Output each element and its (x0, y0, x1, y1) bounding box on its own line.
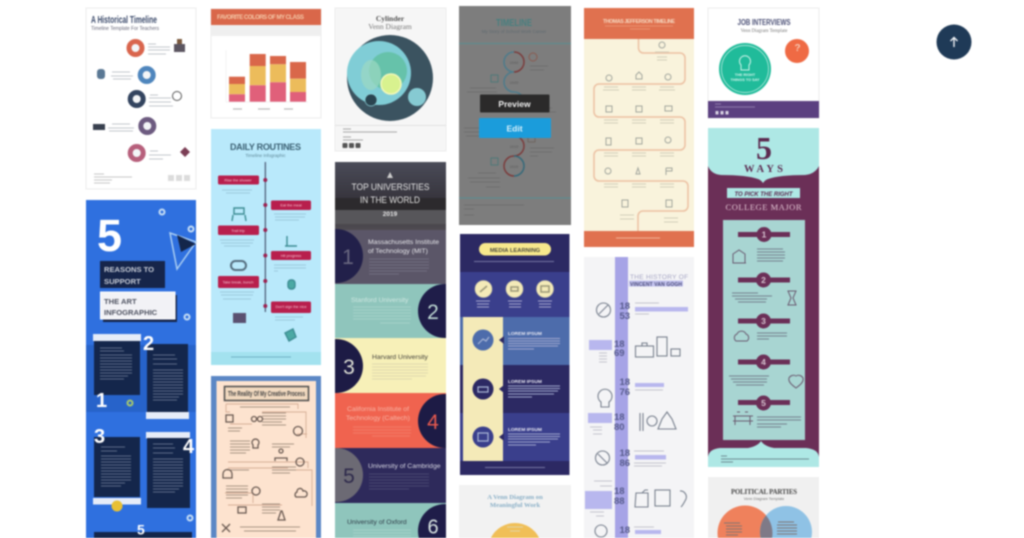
timeline icons (491, 53, 537, 165)
green circle: THINGS TO SAY (730, 78, 760, 82)
chart legend (233, 108, 293, 110)
rank 1: MIT: Massachusetts Institute (368, 239, 439, 246)
subheading: Venn Diagram Template (744, 497, 784, 501)
reason panel 2: 2 (143, 333, 154, 355)
purple footer (708, 101, 819, 118)
timeline year labels: 2000 (510, 61, 518, 65)
timeline captions (603, 52, 678, 222)
years: 18 (614, 412, 625, 423)
rank 2: Stanford: Stanford University (351, 297, 409, 304)
s-curve timeline (504, 52, 524, 176)
reason panel 4 (146, 432, 195, 508)
card: political parties venn (708, 477, 819, 538)
circle text (507, 527, 523, 531)
rank 4: Caltech: California Institute of (347, 406, 409, 413)
box: the art infographic (100, 292, 177, 322)
teal bottom tab (708, 441, 819, 467)
reason panel 5: 5 (137, 522, 145, 538)
timeline icons (605, 42, 672, 207)
rank 2: Stanford: 2 (427, 301, 439, 324)
bottom banner (584, 231, 694, 247)
rank 1: MIT (334, 228, 447, 285)
routine label text (222, 178, 307, 309)
rank 5: Cambridge: University of Cambridge (368, 463, 441, 470)
routine label text: Eat the meal (280, 204, 302, 208)
rank 4: Caltech: 4 (427, 411, 439, 434)
screen icon (233, 313, 246, 323)
ribbon (727, 188, 800, 198)
rank 1: MIT: of Technology (MIT) (368, 248, 428, 255)
title pill: MEDIA LEARNING (490, 248, 541, 254)
heading: political parties: POLITICAL PARTIES (731, 489, 797, 496)
card: top universities (334, 161, 447, 538)
teal top arch (708, 128, 819, 183)
card: job interviews (708, 8, 819, 118)
card: five ways college major (708, 128, 819, 467)
photo header (335, 162, 446, 230)
timeline rings (129, 42, 154, 160)
row headings: LOREM IPSUM (508, 427, 542, 433)
venn circles (347, 35, 433, 121)
box: the art infographic: INFOGRAPHIC (104, 308, 158, 317)
years: 18 (620, 525, 630, 536)
card: creative process (211, 376, 321, 538)
purple timeline band (615, 257, 628, 538)
timeline year labels: 2005 (510, 81, 518, 85)
step numbers: 3 (761, 316, 766, 326)
rank 3: Harvard (334, 337, 447, 394)
card: meaningful work venn diagram (459, 485, 571, 538)
routine label text: Trail trip (231, 229, 245, 233)
preview button: Preview (498, 99, 531, 109)
step bars (738, 227, 790, 410)
photo header: TOP UNIVERSITIES (352, 182, 430, 193)
card: thomas jefferson timeline (584, 8, 694, 247)
line icons (595, 303, 686, 537)
bar chart (226, 50, 308, 102)
rank 1: MIT: 1 (342, 246, 354, 269)
big number 5: 5 (756, 130, 772, 166)
rank 4: Caltech: Technology (Caltech) (346, 415, 410, 422)
years: 18 (620, 377, 630, 388)
text snippets (226, 407, 300, 531)
years: 18 (620, 448, 630, 459)
rank 4: Caltech (334, 392, 447, 449)
preview button (480, 94, 550, 112)
highlighted labels (585, 307, 688, 534)
top banner (584, 8, 694, 39)
routine label text: Take break, bunch (222, 280, 254, 284)
heading: daily routines: DAILY ROUTINES (230, 142, 301, 152)
subheading: Timeline Infographic (245, 153, 286, 158)
row headings (508, 331, 542, 433)
row body text (508, 338, 560, 445)
rank 3: Harvard: 3 (343, 356, 355, 379)
green circle: THE RIGHT (735, 73, 756, 77)
subheading: My Story of School Work Career (482, 29, 547, 34)
chart header: FAVORITE COLORS OF MY CLASS (217, 15, 304, 21)
reason panel 3: 3 (94, 426, 105, 448)
title pill (479, 243, 551, 256)
timeline captions (464, 66, 556, 215)
photo header: 2019 (383, 211, 398, 218)
card: daily routines (211, 129, 321, 365)
subtitle (474, 260, 554, 262)
title box (224, 386, 308, 400)
green circle (719, 43, 771, 95)
flow lines (225, 404, 312, 506)
side text (590, 303, 666, 527)
years: 80 (614, 422, 625, 433)
dark triangle (177, 235, 196, 252)
rank 3: Harvard: Harvard University (372, 354, 428, 361)
routine label text: Don't sign the nice (275, 305, 307, 309)
decorative rings (128, 210, 194, 520)
reason panel 1: 1 (96, 390, 107, 412)
box: reasons to support: REASONS TO (104, 265, 154, 274)
rank 6: Oxford: University of Oxford (347, 519, 407, 526)
card: five reasons art infographic (86, 200, 196, 538)
years (614, 301, 630, 536)
step numbers: 1 (762, 230, 767, 240)
card: historical timeline (86, 8, 196, 189)
years: 18 (614, 486, 625, 497)
timeline dots (263, 178, 267, 308)
rank 5: Cambridge (334, 447, 447, 504)
step numbers: 2 (761, 275, 766, 285)
row headings: LOREM IPSUM (508, 331, 542, 337)
step numbers (761, 230, 767, 408)
years: 18 (614, 339, 625, 350)
years: 76 (620, 387, 630, 398)
top icons (475, 280, 554, 298)
photo header: IN THE WORLD (360, 195, 420, 206)
box: reasons to support: SUPPORT (104, 277, 141, 286)
card: favorite colors bar chart (211, 9, 321, 118)
card: media learning (460, 234, 570, 475)
routine label text: Hit progress (281, 254, 301, 258)
reason panel 3 (93, 426, 141, 512)
routine label text: Rise the shower (224, 178, 252, 182)
heading: job interviews: JOB INTERVIEWS (738, 18, 791, 27)
sources text (343, 129, 397, 140)
heading: ways: WAYS (744, 164, 783, 175)
rank 6: Oxford (335, 503, 446, 538)
edit button: Edit (506, 124, 523, 134)
title box: The Reality Of My Creative Process (228, 391, 305, 398)
heading: timeline: TIMELINE (496, 18, 532, 29)
orange circle: ? (794, 43, 801, 54)
subheading: venn diagram: Venn Diagram (368, 22, 412, 31)
rank 5: Cambridge: 5 (343, 465, 355, 488)
ribbon: TO PICK THE RIGHT (734, 192, 794, 198)
routine captions (220, 190, 306, 320)
social icons (342, 143, 360, 148)
edit button (479, 118, 551, 138)
card: history of vincent van gogh (584, 257, 694, 538)
timeline captions (108, 44, 173, 159)
routine labels (218, 176, 311, 313)
reason panel 2 (143, 333, 189, 419)
content panel (723, 220, 805, 440)
big number 5: 5 (97, 210, 122, 261)
subheading: Venn Diagram Template (741, 29, 787, 34)
card: meaningful work venn diagram: Meaningful Work (490, 502, 540, 509)
timeline year labels: 2020 (510, 165, 518, 169)
reason panel 5 (94, 522, 192, 538)
step text (729, 249, 801, 427)
yellow circle (491, 523, 539, 538)
rank 2: Stanford (334, 283, 447, 339)
footer caption (231, 356, 291, 358)
timeline icons (93, 39, 190, 157)
venn circles (718, 505, 812, 538)
rank 6: Oxford: 6 (427, 516, 439, 538)
years: 88 (614, 496, 625, 507)
top banner: THOMAS JEFFERSON TIMELINE (603, 19, 676, 25)
card: timeline hover state (459, 6, 571, 225)
divider (335, 124, 446, 127)
years: 53 (620, 311, 630, 322)
divider lines (459, 44, 571, 198)
footer text and social icons (94, 174, 132, 183)
card: cylinder venn diagram (335, 8, 446, 151)
years: 18 (620, 301, 630, 312)
subheading: college major: COLLEGE MAJOR (726, 202, 802, 212)
routine icons (231, 208, 297, 341)
decorative triangle (170, 233, 196, 269)
box: the art infographic: THE ART (104, 297, 137, 306)
row headings: LOREM IPSUM (508, 379, 542, 385)
box: reasons to support (100, 261, 165, 288)
subheading: timeline: Timeline Template For Teachers (91, 26, 159, 32)
process icons (222, 415, 307, 532)
subheading: VINCENT VAN GOGH (630, 282, 682, 288)
heading: historical timeline: A Historical Timeline (91, 14, 157, 26)
footer text (485, 466, 545, 468)
scroll to top button (936, 24, 972, 60)
row circles (472, 330, 504, 448)
step numbers: 4 (761, 357, 766, 367)
venn title: A Venn Diagram on (487, 494, 543, 501)
step icons (733, 250, 803, 425)
heading: cylinder: Cylinder (376, 14, 405, 23)
top icon captions (476, 301, 552, 307)
heading: THE HISTORY OF (630, 274, 688, 281)
top icon glyphs (480, 286, 549, 292)
reason panel 4: 4 (183, 436, 195, 458)
reason panel 1 (93, 334, 141, 412)
row icons (478, 337, 489, 441)
winding path (594, 39, 688, 231)
years: 86 (620, 458, 630, 469)
step numbers: 5 (761, 398, 766, 408)
years: 69 (614, 348, 625, 359)
timeline spine (265, 162, 266, 312)
timeline year labels (510, 61, 518, 169)
timeline year labels: 2015 (510, 145, 518, 149)
